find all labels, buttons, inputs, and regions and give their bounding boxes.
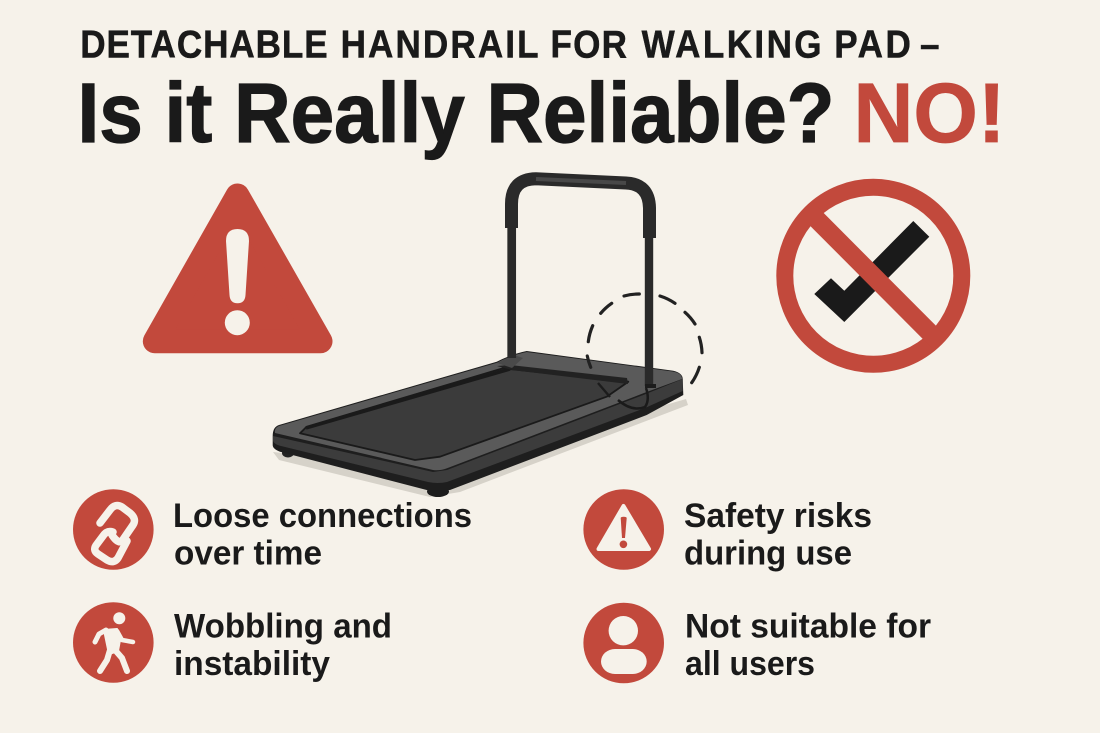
icon: small warning triangle <box>598 506 649 549</box>
deck top face <box>275 352 682 470</box>
icon: walking person <box>95 612 133 671</box>
icon: user <box>601 616 647 674</box>
left post <box>507 226 516 358</box>
deck base <box>273 351 683 490</box>
deck side band <box>273 379 683 483</box>
dashed detail circle <box>587 294 702 383</box>
handrail <box>512 179 650 238</box>
item: loose connections: Loose connections <box>173 497 472 535</box>
icon: warning triangle <box>155 196 320 341</box>
title: – <box>920 22 940 66</box>
post base <box>645 384 656 388</box>
feet <box>282 448 294 458</box>
item: not suitable: all users <box>685 645 815 683</box>
front crossbar <box>497 365 628 384</box>
icon: crossed-out check mark <box>785 187 962 364</box>
connector line <box>598 383 610 397</box>
left foot plate <box>497 355 523 368</box>
title <box>78 22 1006 160</box>
walking pad illustration <box>273 179 702 497</box>
item: wobbling: instability <box>174 645 330 683</box>
item: not suitable: Not suitable for <box>685 608 931 646</box>
item: not suitable <box>583 603 931 683</box>
title: PAD <box>834 22 911 66</box>
item: loose connections: over time <box>174 534 322 572</box>
title: FOR <box>550 22 627 66</box>
item: loose connections <box>73 489 472 572</box>
title: WALKING <box>642 22 822 66</box>
icon: broken chain link <box>95 506 134 562</box>
title: DETACHABLE <box>80 22 328 66</box>
title: NO! <box>854 66 1006 160</box>
item: safety risks: during use <box>684 534 852 572</box>
connector hook <box>618 388 648 408</box>
item: wobbling: Wobbling and <box>174 608 392 646</box>
belt top edge <box>306 369 510 428</box>
title: HANDRAIL <box>341 22 539 66</box>
item: safety risks <box>583 489 872 572</box>
right post <box>645 236 653 386</box>
handrail highlight <box>536 179 626 183</box>
title: Is it Really Reliable? <box>78 66 834 160</box>
item: wobbling <box>73 602 392 683</box>
item: safety risks: Safety risks <box>684 497 872 535</box>
running belt <box>300 368 628 460</box>
floor shadow <box>273 399 688 497</box>
